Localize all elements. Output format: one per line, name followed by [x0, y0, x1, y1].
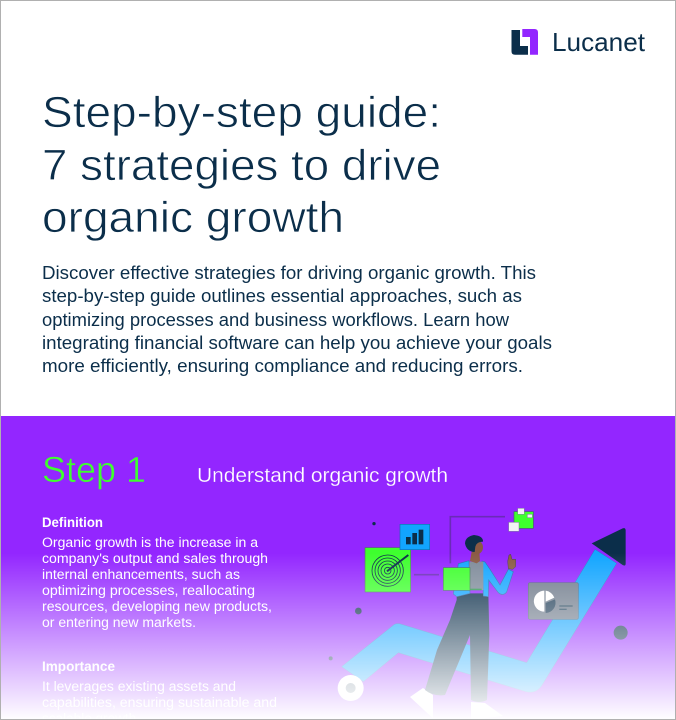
definition text block: [42, 515, 272, 630]
person: trousers: [425, 593, 489, 702]
step 1 label: Step 1: [42, 449, 146, 490]
header background: [0, 0, 676, 416]
definition heading: Definition: [42, 515, 103, 530]
person: face: [472, 541, 483, 554]
connector lines: [414, 517, 505, 575]
title: 7 strategies to drive: [42, 141, 441, 190]
person: left hand: [453, 588, 467, 594]
definition body: resources, developing new products,: [42, 599, 272, 614]
importance heading: Importance: [42, 659, 115, 674]
logo wordmark: Lucanet: [552, 27, 646, 57]
intro paragraph: optimizing processes and business workflows. Learn how: [42, 310, 510, 330]
logo mark: [512, 29, 538, 55]
decorative dots: [329, 522, 628, 660]
bottom white fade: [0, 553, 676, 720]
step 1 heading: Understand organic growth: [197, 465, 448, 487]
icon: green card with squares: [509, 508, 533, 531]
importance body: capabilities, ensuring sustainable and: [42, 695, 277, 710]
definition body: [42, 535, 272, 630]
definition body: internal enhancements, such as: [42, 567, 240, 582]
person: thumbs-up hand: [508, 554, 516, 569]
definition body: or entering new markets.: [42, 615, 196, 630]
illustration: person with growth arrow: [329, 508, 628, 720]
panel: step 1 background: [0, 416, 676, 720]
growth arrow head: [592, 528, 626, 566]
icon: target card: [365, 548, 411, 592]
importance body: [42, 679, 277, 720]
person: [410, 535, 516, 720]
intro paragraph: integrating financial software can help you achieve your goals: [42, 333, 552, 353]
person: left jacket: [453, 561, 470, 597]
importance text block: [42, 659, 277, 720]
intro paragraph: more efficiently, ensuring compliance and reducing errors.: [42, 356, 523, 376]
person: hair: [465, 535, 483, 552]
title: [42, 88, 441, 242]
person: shirt: [469, 562, 483, 590]
title: Step-by-step guide:: [42, 88, 441, 137]
logo: Lucanet: [512, 27, 646, 57]
person: right arm and jacket: [482, 561, 513, 597]
growth arrow band: [342, 549, 617, 692]
importance body: It leverages existing assets and: [42, 679, 236, 694]
icon: pie chart card: [528, 583, 578, 619]
definition body: company's output and sales through: [42, 551, 268, 566]
person: neck: [470, 552, 480, 563]
title: organic growth: [42, 193, 344, 242]
person: shoes: [410, 688, 503, 720]
definition body: optimizing processes, reallocating: [42, 583, 255, 598]
icon: bar chart card: [400, 524, 430, 550]
white ring: [338, 675, 364, 701]
intro paragraph: Discover effective strategies for driving organic growth. This: [42, 263, 536, 283]
intro paragraph: step-by-step guide outlines essential approaches, such as: [42, 286, 522, 306]
definition body: Organic growth is the increase in a: [42, 535, 259, 550]
person: laptop: [443, 568, 482, 590]
intro paragraph: [42, 263, 552, 376]
